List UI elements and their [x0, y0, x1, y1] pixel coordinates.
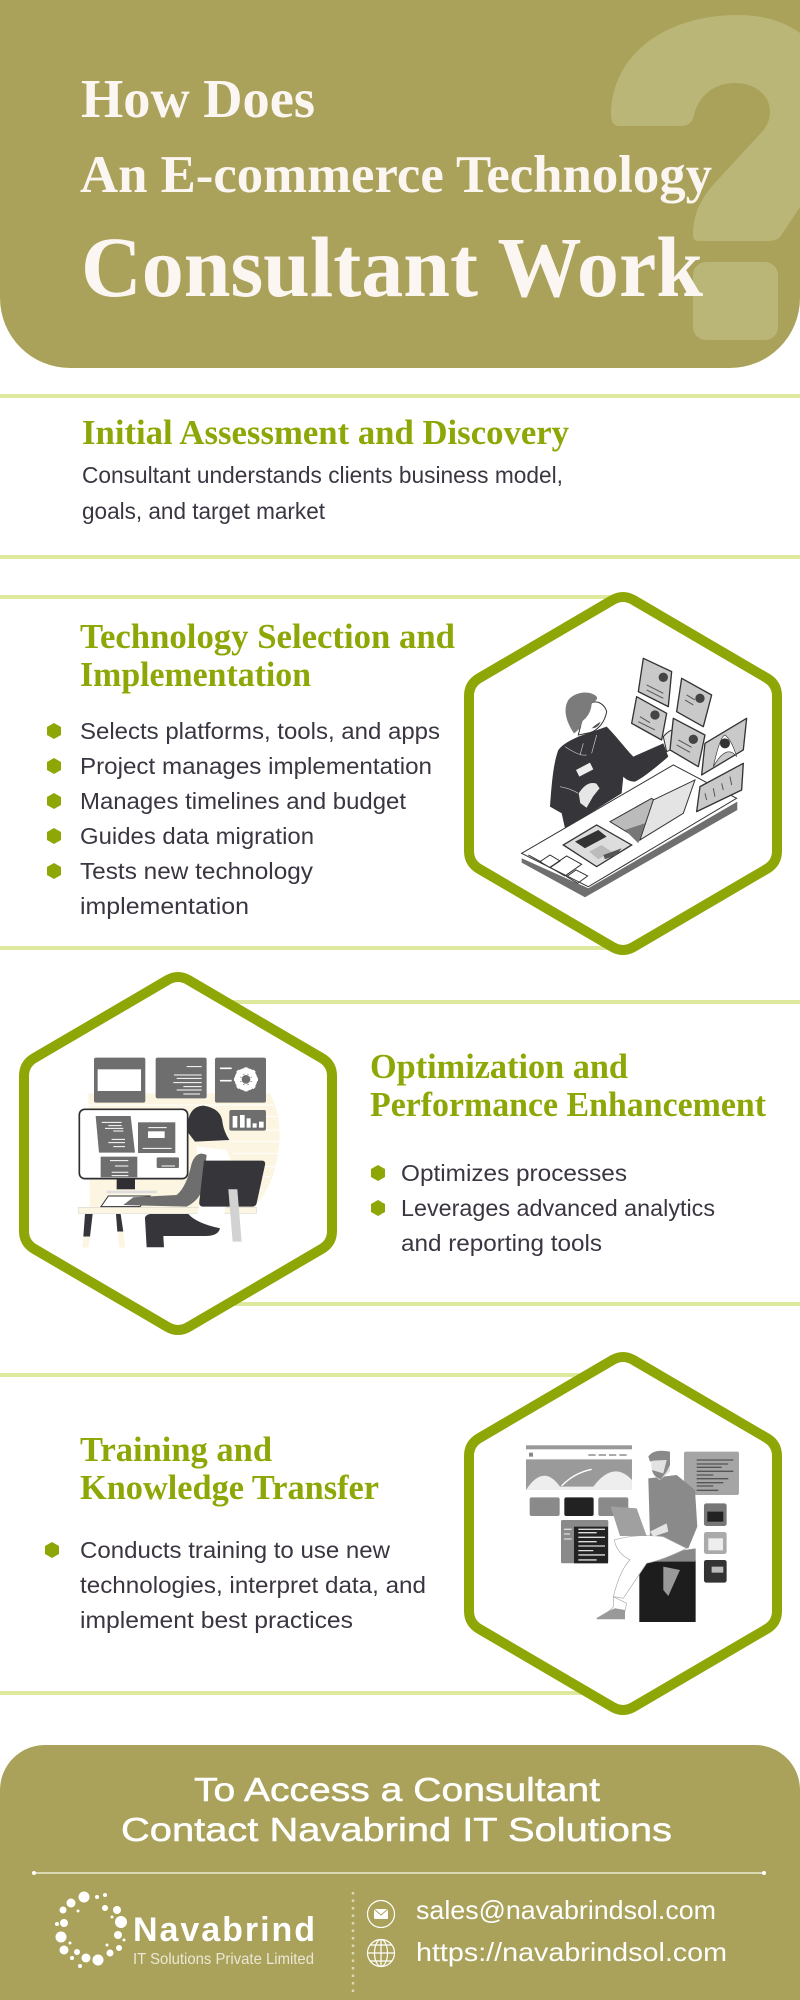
heading: optimization [370, 1047, 766, 1124]
logo: Navabrind: Navabrind [133, 1911, 315, 1949]
heading: technology selection [80, 617, 456, 694]
bullet list: technology selection: Project manages implementation [80, 753, 432, 779]
bullet list: optimization: Optimizes processes [401, 1160, 627, 1186]
heading: optimization: Optimization and [370, 1047, 629, 1086]
panel: initial assessment [82, 413, 569, 524]
contact: email: sales@navabrindsol.com [416, 1895, 716, 1925]
logo: Navabrind [55, 1892, 315, 1968]
heading: optimization: Performance Enhancement [370, 1085, 766, 1124]
icon: hexagon with analyst illustration [24, 977, 332, 1330]
text block: initial assessment [82, 462, 563, 524]
bullet list: technology selection: implementation [80, 893, 249, 919]
footer heading: To Access a Consultant [194, 1771, 600, 1808]
bullet list: technology selection: Selects platforms, tools, and apps [80, 718, 440, 744]
panel: technology selection [47, 597, 777, 950]
footer heading [121, 1771, 672, 1848]
heading: technology selection: Implementation [80, 655, 311, 694]
bullet list: technology selection: Guides data migration [80, 823, 314, 849]
contact: website: https://navabrindsol.com [416, 1937, 727, 1967]
bullet list: training: Conducts training to use new [80, 1537, 391, 1563]
heading: training: Training and [80, 1430, 273, 1469]
section dividers [0, 394, 800, 1695]
heading: technology selection: Technology Selection and [80, 617, 456, 656]
heading: training [80, 1430, 379, 1507]
bullet list: technology selection: Tests new technology [80, 858, 313, 884]
icon: email [368, 1900, 394, 1928]
panel: optimization [24, 977, 766, 1330]
bullet list: training [45, 1537, 426, 1633]
heading: training: Knowledge Transfer [80, 1468, 379, 1507]
bullet list: training: technologies, interpret data, and [80, 1572, 426, 1598]
header banner [0, 0, 800, 368]
bullet list: optimization: and reporting tools [401, 1230, 602, 1256]
footer heading: Contact Navabrind IT Solutions [121, 1811, 672, 1848]
bullet list: technology selection [47, 718, 440, 919]
title: How Does [81, 68, 315, 129]
bullet list: optimization: Leverages advanced analytics [401, 1195, 715, 1221]
title [80, 68, 712, 315]
title: An E-commerce Technology [80, 146, 712, 204]
icon: hexagon with consultant illustration [469, 597, 777, 950]
panel: training [45, 1357, 777, 1710]
footer panel [0, 1745, 800, 2000]
text block: initial assessment: Consultant understands clients business model, [82, 462, 563, 488]
icon: globe [368, 1940, 394, 1966]
bullet list: technology selection: Manages timelines and budget [80, 788, 406, 814]
bullet list: optimization [371, 1160, 715, 1256]
heading: initial assessment: Initial Assessment and Discovery [82, 413, 569, 452]
icon: hexagon with developer illustration [469, 1357, 777, 1710]
bullet list: training: implement best practices [80, 1607, 353, 1633]
icon: large question mark [611, 15, 800, 340]
title: Consultant Work [81, 219, 703, 315]
logo: Navabrind: IT Solutions Private Limited [133, 1951, 314, 1968]
text block: initial assessment: goals, and target market [82, 498, 325, 524]
